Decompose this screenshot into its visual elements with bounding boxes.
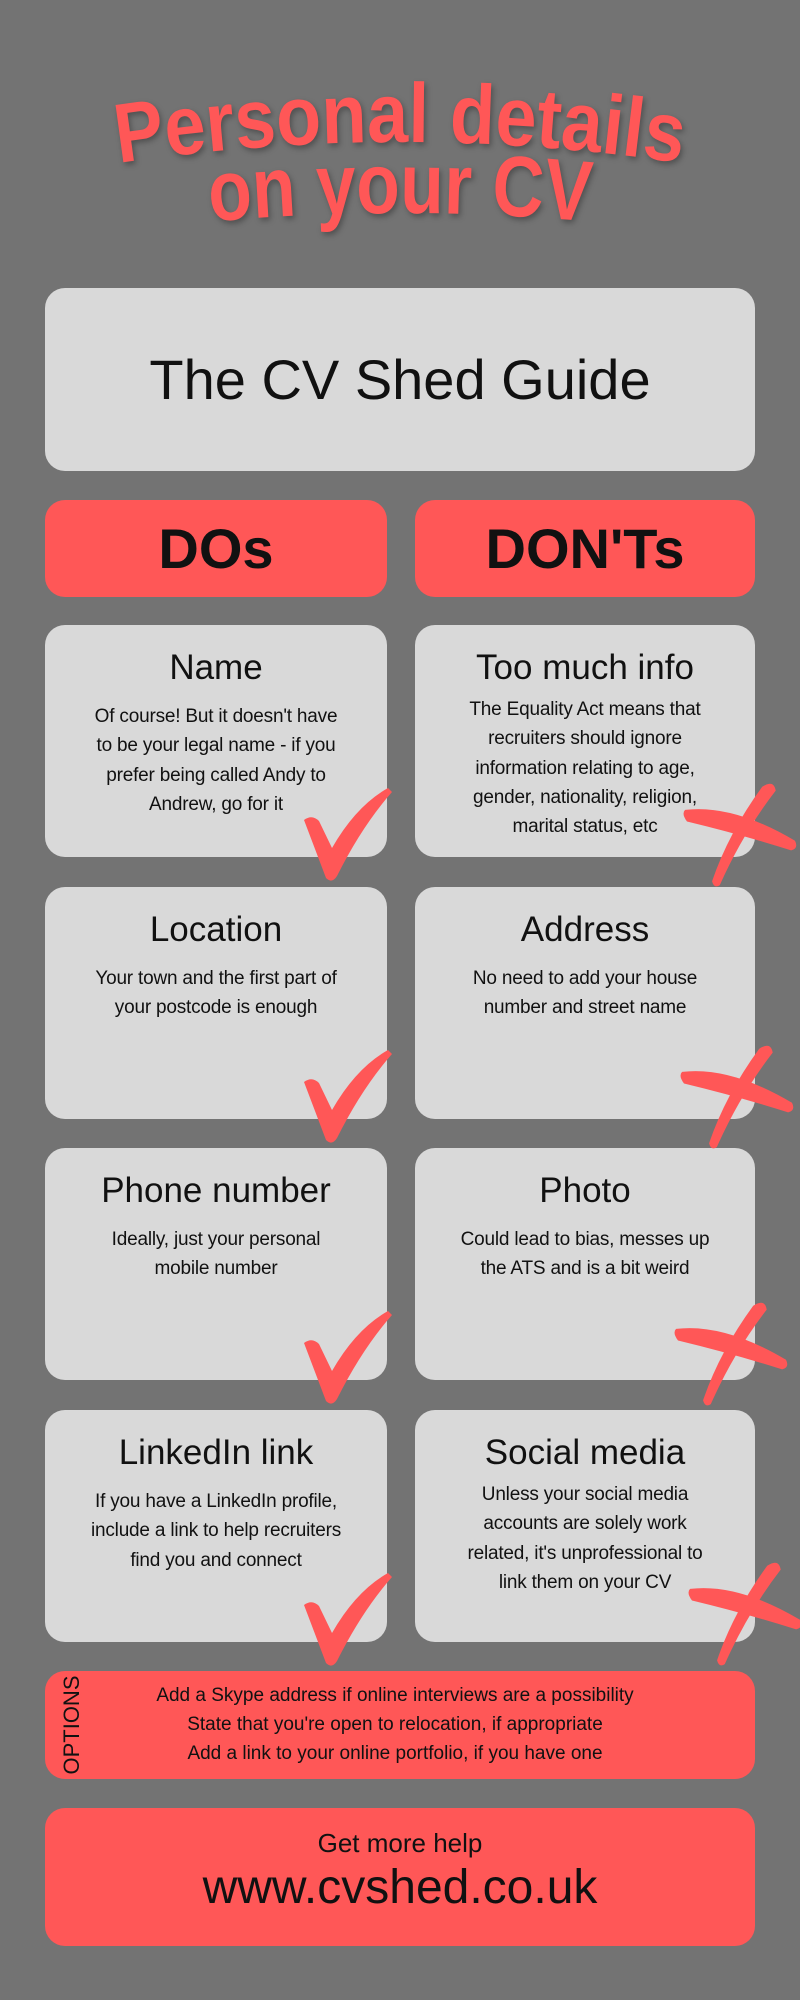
card: social media: Unless your social media: [482, 1484, 688, 1505]
card: too much info: recruiters should ignore: [488, 728, 682, 749]
card: name: to be your legal name - if you: [96, 735, 336, 756]
card: photo: the ATS and is a bit weird: [481, 1258, 689, 1279]
card: too much info: [415, 625, 755, 857]
icon: cross 4: [688, 1562, 800, 1666]
card: address: No need to add your house: [473, 968, 697, 989]
card: social media: accounts are solely work: [483, 1513, 687, 1534]
card: name: prefer being called Andy to: [106, 765, 326, 786]
icon: cross 2: [680, 1046, 794, 1148]
card: name: Name: [169, 648, 263, 687]
card: too much info: marital status, etc: [512, 816, 658, 837]
card: linkedin: find you and connect: [130, 1550, 302, 1571]
icon: check 2: [304, 1050, 392, 1143]
DOs heading: [45, 500, 387, 597]
icon: cross 1: [684, 784, 796, 886]
card: address: Address: [521, 910, 649, 949]
card: linkedin: [45, 1410, 387, 1642]
card: photo: Photo: [539, 1171, 631, 1210]
options list: Add a link to your online portfolio, if you have one: [187, 1743, 603, 1764]
card: too much info: information relating to age,: [475, 758, 695, 779]
options list: Add a Skype address if online interviews are a possibility: [156, 1685, 634, 1706]
icon: check 1: [304, 788, 392, 881]
guide box: The CV Shed Guide: [149, 348, 651, 411]
DON'Ts heading: DON'Ts: [486, 517, 684, 580]
card: location: Your town and the first part of: [95, 968, 337, 989]
card: too much info: The Equality Act means that: [469, 699, 701, 720]
options panel: [45, 1671, 755, 1779]
card: social media: [415, 1410, 755, 1642]
card: name: Andrew, go for it: [149, 794, 283, 815]
card: social media: link them on your CV: [499, 1572, 671, 1593]
footer: Get more help: [318, 1828, 482, 1858]
card: address: [415, 887, 755, 1119]
title: Personal details: [116, 81, 685, 166]
card: photo: [415, 1148, 755, 1380]
card: phone: [45, 1148, 387, 1380]
footer: [45, 1808, 755, 1946]
card: social media: related, it's unprofessional to: [467, 1543, 703, 1564]
card: linkedin: LinkedIn link: [119, 1433, 313, 1472]
footer: www.cvshed.co.uk: [203, 1861, 597, 1914]
card: location: [45, 887, 387, 1119]
card: address: number and street name: [484, 997, 686, 1018]
icon: check 4: [304, 1573, 392, 1666]
card: location: Location: [150, 910, 282, 949]
card: phone: mobile number: [154, 1258, 278, 1279]
card: too much info: gender, nationality, religion,: [473, 787, 697, 808]
card: linkedin: include a link to help recruiters: [91, 1520, 341, 1541]
card: location: your postcode is enough: [115, 997, 317, 1018]
card: name: Of course! But it doesn't have: [95, 706, 337, 727]
options label: OPTIONS: [59, 1676, 84, 1775]
card: linkedin: If you have a LinkedIn profile,: [95, 1491, 337, 1512]
card: phone: Phone number: [101, 1171, 331, 1210]
options list: [156, 1685, 634, 1764]
DON'Ts heading: [415, 500, 755, 597]
card: too much info: Too much info: [476, 648, 694, 687]
card: phone: Ideally, just your personal: [112, 1229, 320, 1250]
icon: check 3: [304, 1311, 392, 1404]
DOs heading: DOs: [158, 517, 274, 580]
card: name: [45, 625, 387, 857]
card: social media: Social media: [485, 1433, 685, 1472]
guide box: [45, 288, 755, 471]
icon: cross 3: [674, 1302, 788, 1406]
title: [116, 81, 685, 237]
options list: State that you're open to relocation, if appropriate: [187, 1714, 603, 1735]
card: photo: Could lead to bias, messes up: [461, 1229, 709, 1250]
title: on your CV: [211, 156, 596, 237]
